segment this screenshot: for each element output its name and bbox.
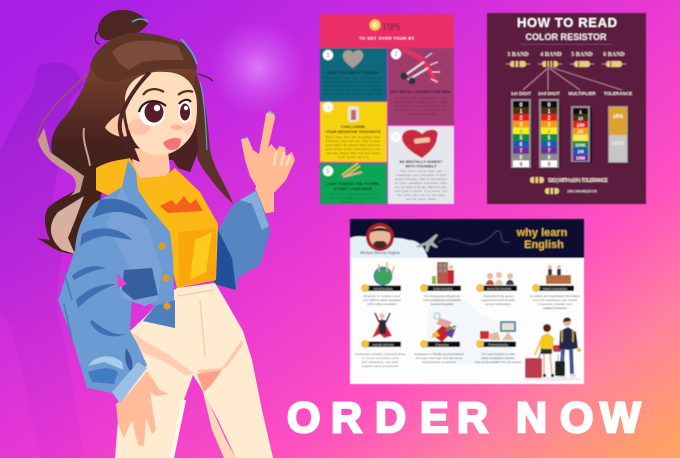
item: passport and hands: that serves people from all sectors — [475, 360, 522, 364]
item: passport and hands: matter of passport industry — [481, 356, 516, 360]
second digit colour chart: 9 — [548, 162, 551, 168]
title: why learn — [516, 227, 568, 239]
first digit colour chart — [511, 99, 532, 169]
second digit colour chart: 8 — [548, 155, 551, 161]
left eye — [139, 100, 166, 126]
item: hero employee: is more confident and — [362, 356, 398, 360]
tip 2 panel: CUT OFF ALL CONTACT FOR REAL — [390, 90, 452, 94]
item: serve the tourists — [476, 272, 517, 306]
resistor icons — [506, 61, 626, 67]
first digit colour chart: 9 — [520, 162, 523, 168]
tolerance chart — [608, 106, 629, 164]
panel: how to read color resistor — [487, 13, 646, 204]
right side hair strands — [190, 74, 233, 204]
first digit colour chart: 2 — [520, 116, 523, 122]
example resistor caption: 52Ω | WITH ±10% TOLERANCE — [548, 178, 609, 184]
panel: why learn english — [350, 219, 584, 384]
second digit colour chart: 6 — [548, 142, 551, 148]
subtitle: TO GET OVER YOUR EX — [359, 36, 415, 40]
right jacket sleeve — [214, 190, 270, 290]
woman — [535, 324, 561, 377]
tip 1 panel: so you can begin to fill the space — [324, 84, 382, 88]
author name: Michael Stevens English — [360, 250, 400, 255]
item: hero employee: employees verbally communicating — [355, 352, 405, 356]
band type labels: 5 BAND — [571, 52, 593, 58]
tip 3 panel: 3 — [326, 105, 330, 111]
tip 3 panel: hammer and tell you that it was — [326, 139, 381, 143]
profile photo — [366, 223, 394, 251]
tip 4 panel: brutal honesty. This is the person — [395, 177, 447, 181]
tip 3 panel — [320, 102, 387, 162]
first digit colour chart: 7 — [520, 149, 523, 155]
item: tourism: world tourism — [374, 287, 393, 291]
tip 2 panel: No more calls, messages or late — [395, 96, 447, 100]
title: tips: TIPS — [382, 22, 400, 32]
tip 4 panel: the only way out of the pain — [397, 193, 445, 197]
tip 2 panel — [388, 48, 454, 125]
front hair — [90, 33, 213, 150]
item: tourism: English is widely used — [364, 294, 400, 298]
tip 4 panel — [388, 126, 454, 204]
flight path — [438, 231, 510, 244]
first digit colour chart: 3 — [520, 122, 523, 128]
tip 5 panel: the next chapter of your life — [329, 196, 377, 200]
item: colourful city: Overview — [435, 343, 449, 347]
item: passport and hands: Professionally — [488, 343, 508, 347]
band type labels — [507, 52, 625, 58]
hand on thigh — [116, 371, 169, 446]
item: serve the tourists: serve the tourists — [487, 287, 512, 291]
band type labels: 3 BAND — [507, 52, 529, 58]
red suitcase — [525, 348, 542, 378]
second digit colour chart: 3 — [548, 122, 551, 128]
multiplier colour chart: 10M — [576, 156, 585, 160]
item: hotel industry: hotel industry — [434, 287, 453, 291]
second digit colour chart: 5 — [548, 135, 551, 141]
icon: bandaged heart — [402, 130, 438, 158]
poster header — [320, 14, 454, 48]
call to action: order now: ORDER NOW — [287, 394, 641, 442]
first digit colour chart: 5 — [520, 135, 523, 141]
item: colourful city: through trainings and personal — [416, 356, 462, 360]
connector lines — [523, 67, 622, 90]
tip 4 panel: at their weakest because they — [395, 181, 448, 185]
item: reception desk: negative impression — [543, 306, 567, 310]
man — [559, 317, 581, 378]
title — [516, 227, 568, 251]
item: reception desk: travel companies — [543, 287, 567, 291]
item: serve the tourists: understand the guest — [483, 294, 513, 298]
item: tourism: 1000 million speakers — [367, 302, 398, 306]
tip 4 panel: WITH YOURSELF — [405, 164, 437, 168]
tip 1 panel: you love to do every single day — [324, 92, 383, 96]
item: hero employee: a guest more prominent — [362, 364, 398, 368]
item: passport and hands — [475, 321, 522, 364]
icon: scissors — [400, 62, 428, 84]
band type labels: 6 BAND — [603, 52, 625, 58]
tip 2 panel: the distance real so that you can — [395, 104, 447, 108]
multiplier colour chart — [571, 106, 592, 163]
example resistor caption: 2500 OHM RESISTOR — [567, 190, 598, 194]
multiplier colour chart: 100 — [577, 122, 585, 128]
item: hotel industry — [420, 262, 461, 306]
item: reception desk — [530, 265, 580, 310]
tip 3 panel: CHALLENGE — [341, 124, 366, 129]
tip 5 panel: Focus on making plans for — [329, 192, 377, 196]
icon: light bulb — [370, 20, 380, 30]
column labels: TOLERANCE — [604, 91, 632, 96]
multiplier colour chart: 1 — [579, 109, 582, 114]
column labels: 2nd DIGIT — [538, 91, 560, 96]
dark hair behind neck — [120, 122, 198, 172]
item: hero employee — [355, 313, 405, 368]
example resistor caption — [530, 177, 609, 194]
second digit colour chart: 1 — [548, 109, 551, 115]
item: tourism: over billions native speakers — [363, 298, 402, 302]
item: hotel industry: the employees should be — [424, 294, 460, 298]
tip 3 panel: you like about who you are today — [326, 151, 381, 155]
tip 1 panel: Recognise what has ended and sit — [324, 76, 382, 80]
item: colourful city — [414, 313, 465, 364]
multiplier colour chart: 1K — [578, 129, 584, 134]
tip 4 panel: are so hard to let go. Remind your — [395, 185, 447, 189]
tip 4 panel: self that it hurts. If it hurts, it's — [395, 189, 448, 193]
tip 4 panel: The only thing that can — [400, 169, 442, 173]
tip 5 panel — [320, 163, 387, 204]
multiplier colour chart: 10K — [576, 136, 585, 141]
second digit colour chart: 7 — [548, 149, 551, 155]
item: hotel industry: to serve the guests — [431, 302, 454, 306]
icon: airplane — [416, 234, 438, 252]
neck — [130, 148, 170, 180]
tolerance chart: ±10% — [612, 141, 625, 147]
tip 3 panel: YOUR NEGATIVE THOUGHTS — [326, 129, 381, 134]
first digit colour chart: 6 — [520, 142, 523, 148]
second digit colour chart: 0 — [548, 102, 551, 108]
item: reception desk: to collect and coordinate information — [530, 294, 580, 298]
tip 5 panel: LOOK TOWARD THE FUTURE, — [326, 182, 380, 186]
black suitcase — [555, 354, 565, 376]
multiplier colour chart: 100K — [575, 142, 587, 147]
multiplier colour chart: 1M — [577, 149, 584, 154]
column labels: 1st DIGIT — [511, 91, 531, 96]
item: serve the tourists: requirement and provide — [481, 298, 515, 302]
first digit colour chart: 1 — [520, 109, 523, 115]
title: English — [524, 239, 564, 251]
trousers — [115, 283, 273, 458]
band type labels: 4 BAND — [540, 52, 562, 58]
illustrated girl character — [37, 10, 295, 458]
tip 2 panel: one day at a time — [406, 112, 436, 116]
column labels: MULTIPLIER — [568, 91, 596, 96]
tip 4 panel: you've been dealt — [406, 197, 436, 201]
tip 1 panel — [320, 48, 387, 101]
ear — [105, 112, 127, 137]
yellow shirt — [96, 158, 218, 288]
item: reception desk: from the employee may create — [533, 298, 577, 302]
first digit colour chart: 4 — [520, 129, 523, 135]
item: colourful city: employees to handle communications — [414, 352, 465, 356]
first digit colour chart: 0 — [520, 102, 523, 108]
tip 4 panel: challenge your thoughts is with — [396, 173, 446, 177]
panel: tips poster — [320, 14, 454, 204]
world map background — [425, 296, 513, 365]
column labels — [511, 91, 632, 96]
title: HOW TO READ — [517, 15, 617, 30]
item: tourism — [361, 262, 402, 306]
tip 1 panel: FACE THE EMPTY FEELING — [327, 70, 379, 75]
multiplier colour chart: 10 — [578, 116, 583, 121]
subtitle: COLOR RESISTOR — [526, 32, 607, 42]
raised arm and pointing hand — [241, 111, 295, 214]
item: hero employee: self esteemed, can lead — [362, 360, 398, 364]
tip 2 panel: heal and move on from it all now — [395, 108, 448, 112]
tip 5 panel: 5 — [326, 169, 330, 175]
face — [125, 72, 197, 155]
hair bun — [95, 10, 148, 44]
eyebrows — [143, 89, 193, 95]
second digit colour chart: 2 — [548, 116, 551, 122]
item: serve the tourists: correct information — [485, 302, 511, 306]
item: hero employee: overall delivery — [372, 343, 394, 347]
tip 3 panel: and write down something true — [326, 147, 380, 151]
tip 1 panel: 1 — [326, 53, 330, 59]
dark header with clouds — [350, 219, 584, 258]
tip 3 panel: your fault. Be gentle with yourself — [326, 143, 380, 147]
tip 1 panel: with the emptiness for a moment — [324, 80, 382, 84]
tip 2 panel: 2 — [394, 52, 398, 58]
item: colourful city: development programs — [422, 360, 457, 364]
left jacket body and arm — [58, 160, 175, 403]
tip 3 panel: and keep going — [338, 155, 368, 159]
second digit colour chart: 4 — [548, 129, 551, 135]
nose — [170, 124, 183, 130]
tip 4 panel: BE BRUTALLY HONEST — [400, 160, 443, 164]
tip 2 panel: night checks on their profile; make — [394, 100, 448, 104]
item: reception desk: frequently mistake and — [538, 302, 572, 306]
item: passport and hands: The hotel industry is chief — [481, 352, 515, 356]
tip 3 panel: Don't buy into the thoughts that — [326, 135, 380, 139]
second digit colour chart — [539, 99, 560, 169]
tolerance chart: ±5% — [613, 114, 624, 120]
illustration: traveling couple — [522, 317, 582, 381]
tip 5 panel: & DON'T LOOK BACK — [334, 187, 373, 191]
background silhouette of girl — [0, 63, 84, 458]
right eye — [178, 100, 192, 123]
tip 5 panel: ahead of you — [341, 200, 365, 204]
tip 1 panel: with friends, family and the things — [324, 88, 383, 92]
mouth — [163, 138, 181, 150]
tip 4 panel: 4 — [394, 135, 398, 141]
back hair — [37, 62, 205, 254]
item: hotel industry: communicatively competitive — [423, 298, 461, 302]
first digit colour chart: 8 — [520, 155, 523, 161]
